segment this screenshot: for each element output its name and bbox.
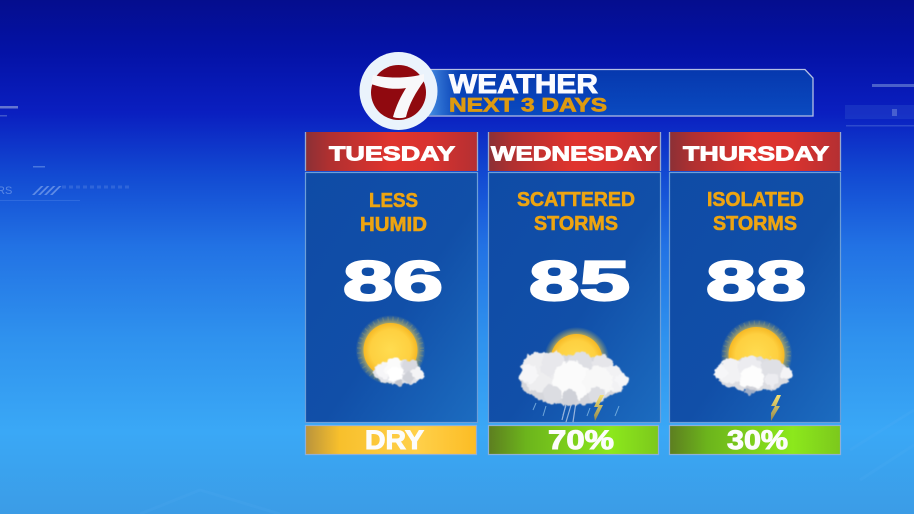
- condition: scattered storms: [517, 188, 635, 235]
- status pill: dry: [306, 425, 476, 455]
- temperature: 88: 88: [706, 249, 806, 312]
- day header: thursday: [669, 132, 841, 171]
- condition: isolated storms: ISOLATED: [707, 188, 804, 211]
- header banner: [360, 52, 813, 130]
- status pill: 30%: [670, 425, 840, 455]
- status pill: 70%: 70%: [548, 425, 614, 455]
- day header: wednesday: WEDNESDAY: [491, 142, 657, 166]
- banner bar: [425, 70, 813, 116]
- column: thursday: [669, 132, 841, 455]
- status pill: 30%: 30%: [727, 425, 788, 455]
- condition: less humid: LESS: [369, 189, 418, 212]
- subtitle: next 3 days: NEXT 3 DAYS: [449, 96, 607, 116]
- condition: isolated storms: STORMS: [713, 212, 797, 235]
- status pill: 70%: [488, 425, 658, 455]
- column: wednesday: [488, 132, 661, 455]
- panel: thursday: [670, 172, 840, 422]
- logo: channel 7: [360, 52, 438, 130]
- icon: sun with small cloud: [356, 315, 426, 387]
- icon: sun with cloud and lightning: [713, 319, 792, 421]
- day header: thursday: THURSDAY: [683, 142, 829, 166]
- day header: wednesday: [488, 132, 661, 171]
- status pill: dry: DRY: [365, 425, 424, 455]
- condition: isolated storms: [707, 188, 804, 235]
- condition: less humid: HUMID: [360, 213, 427, 236]
- temperature: 85: 85: [529, 249, 630, 312]
- panel: wednesday: [488, 172, 660, 422]
- column: tuesday: [305, 132, 478, 455]
- icon: sun with storm cloud: [520, 327, 628, 422]
- title: weather: WEATHER: [449, 69, 598, 99]
- panel: tuesday: [306, 172, 478, 422]
- temperature: 86: 86: [343, 249, 443, 312]
- condition: scattered storms: STORMS: [534, 212, 618, 235]
- condition: scattered storms: SCATTERED: [517, 188, 635, 211]
- condition: less humid: [360, 189, 427, 236]
- day header: tuesday: TUESDAY: [329, 142, 455, 166]
- day header: tuesday: [305, 132, 478, 171]
